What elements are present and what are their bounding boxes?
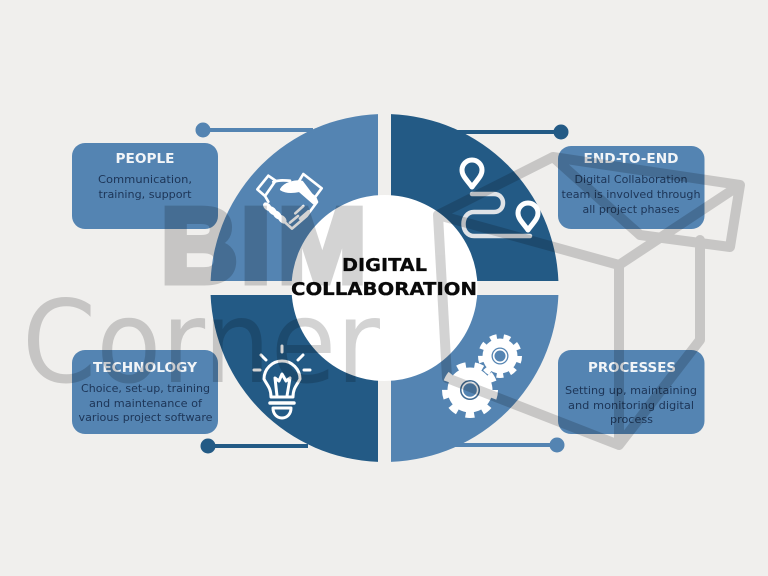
text: technology description: and maintenance of xyxy=(89,397,203,410)
panel: processes xyxy=(558,350,704,434)
text: end-to-end description: all project phases xyxy=(582,203,680,216)
watermark: BIM Corner logo xyxy=(22,157,740,445)
watermark wordmark: BIM: M xyxy=(278,187,366,305)
icon: route with location pins xyxy=(462,160,538,236)
icon: handshake xyxy=(257,174,322,229)
centre white circle xyxy=(292,195,478,381)
text: processes description: and monitoring digital xyxy=(568,399,694,412)
watermark: cube outline xyxy=(438,157,740,445)
text: processes description xyxy=(565,384,697,426)
small gear xyxy=(481,337,519,375)
ring quadrant: technology xyxy=(211,295,378,462)
ring quadrant: processes xyxy=(391,295,558,462)
text: end-to-end description: team is involved through xyxy=(562,188,701,201)
text: end-to-end description: Digital Collaboration xyxy=(574,173,688,186)
panel: end-to-end xyxy=(558,146,704,229)
title: digital collaboration: DIGITAL xyxy=(342,255,427,276)
heading: people: PEOPLE xyxy=(116,152,174,167)
large gear xyxy=(446,366,494,414)
text: people description xyxy=(98,173,192,201)
icon: light bulb xyxy=(254,346,310,418)
title: digital collaboration xyxy=(291,255,477,300)
text: technology description: various project software xyxy=(78,411,213,424)
text: processes description: Setting up, maintaining xyxy=(565,384,697,397)
connector: people xyxy=(196,122,313,138)
text: people description: training, support xyxy=(98,188,192,201)
heading: technology: TECHNOLOGY xyxy=(93,361,198,376)
icon: gears xyxy=(446,337,519,414)
heading: end-to-end: END-TO-END xyxy=(584,152,679,167)
text: technology description xyxy=(78,382,213,424)
title: digital collaboration: COLLABORATION xyxy=(291,279,477,300)
text: people description: Communication, xyxy=(98,173,192,186)
panel: people xyxy=(72,143,218,229)
text: technology description: Choice, set-up, training xyxy=(81,382,210,395)
connector: processes xyxy=(455,438,564,452)
heading: processes: PROCESSES xyxy=(588,361,676,376)
ring quadrant: people xyxy=(211,114,378,281)
ring quadrant: end-to-end xyxy=(391,114,558,281)
connector: end-to-end xyxy=(455,124,568,140)
watermark wordmark: Corner: Corner xyxy=(22,276,380,409)
watermark wordmark: BIM: B xyxy=(161,187,238,305)
connector: technology xyxy=(200,438,308,454)
text: end-to-end description xyxy=(562,173,701,216)
watermark wordmark: BIM: I xyxy=(241,187,270,305)
panel: technology xyxy=(72,350,218,434)
text: processes description: process xyxy=(610,413,653,426)
